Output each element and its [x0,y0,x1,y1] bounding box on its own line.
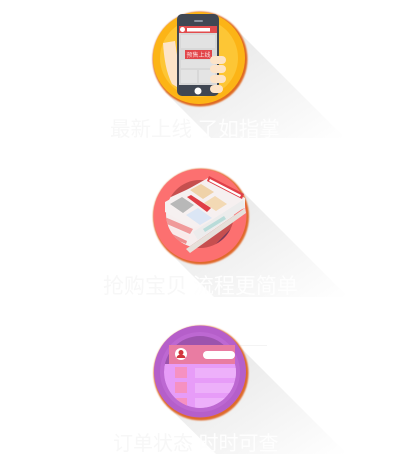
long shadow: second badge [166,182,348,297]
long shadow: third badge [166,340,347,454]
heading: first feature: 最新上线 了如指掌 [110,118,280,141]
long shadow: first badge [165,25,345,138]
icon: hand holding phone badge: 预售上线 [186,51,211,59]
icon: stacked pages badge [153,168,249,264]
icon: hand holding phone badge [152,12,248,106]
icon: order status screen badge [154,326,248,420]
heading: third feature: 订单状态 时时可查 [113,432,279,455]
heading: second feature: 抢购宝贝 流程更简单 [103,275,298,298]
